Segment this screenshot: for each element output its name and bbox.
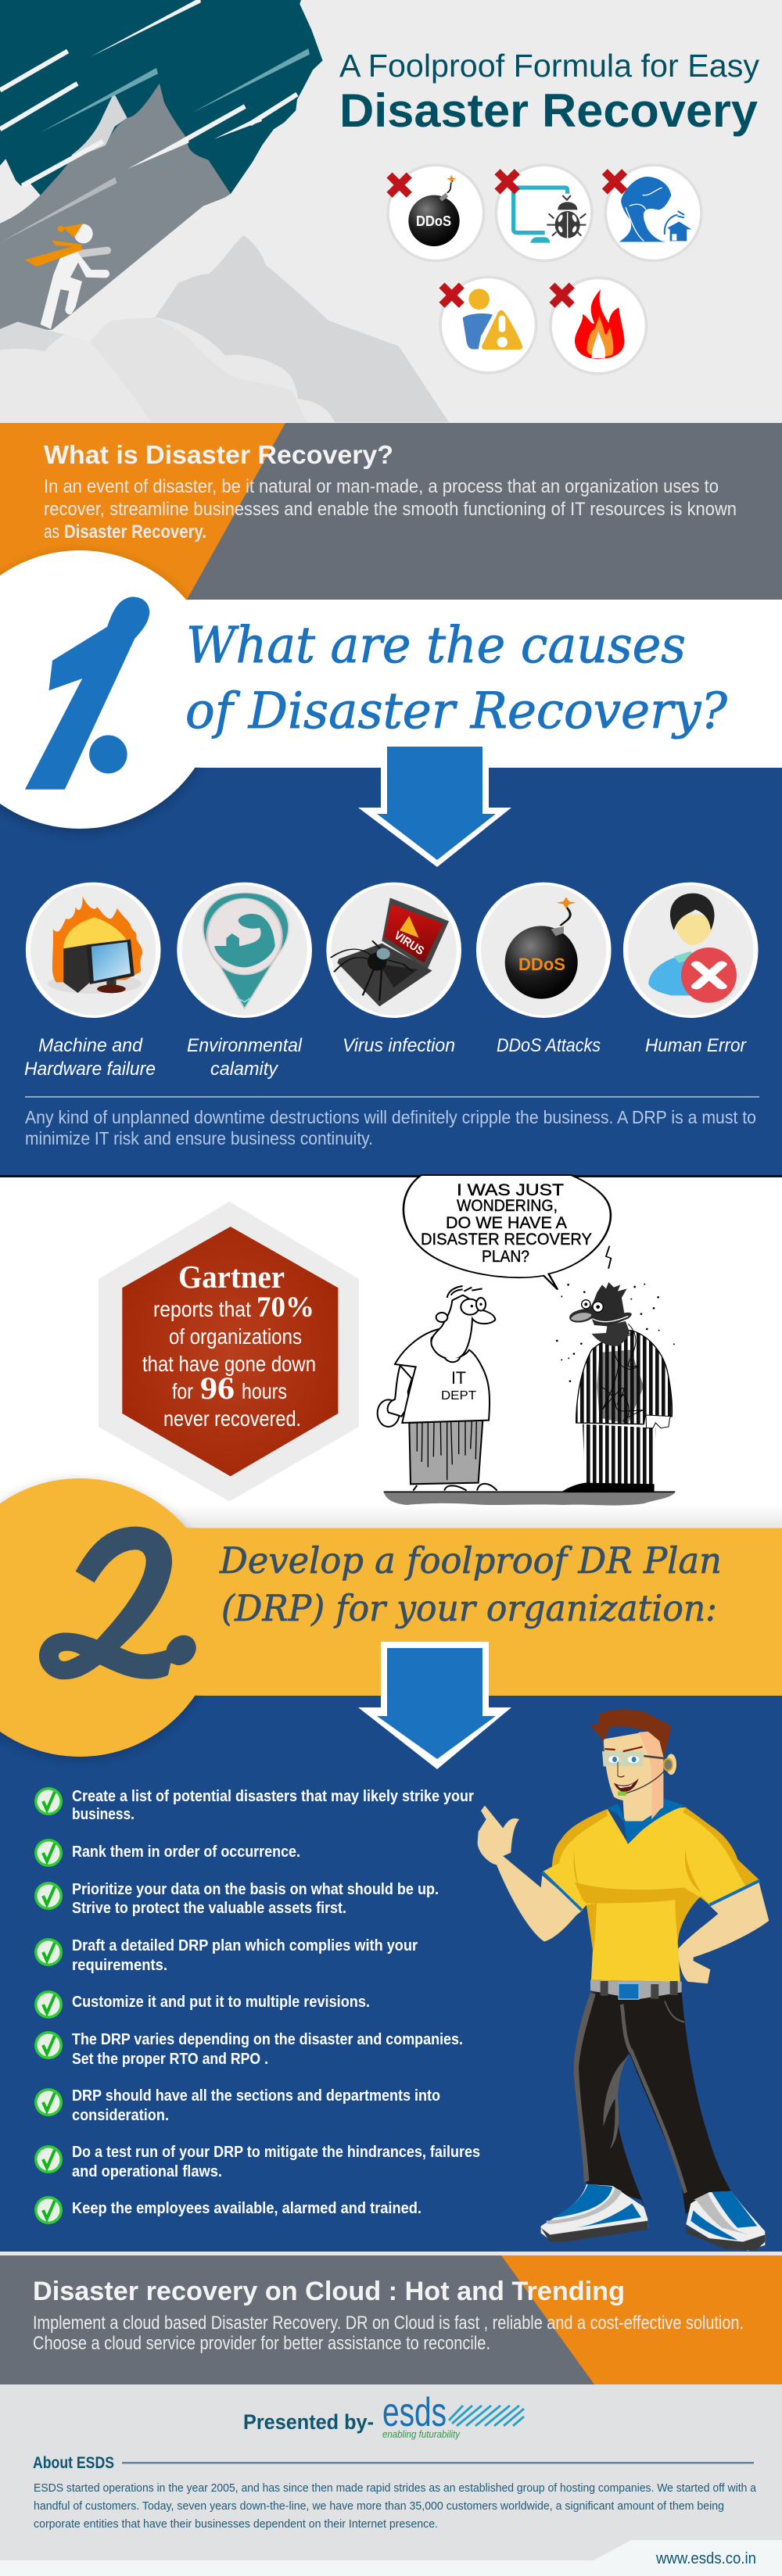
cause labels: Environmental xyxy=(187,1035,303,1056)
callout: Gartner hexagon: reports that xyxy=(153,1297,251,1321)
cause labels: Human Error xyxy=(645,1035,747,1056)
icon: environmental calamity xyxy=(179,883,310,1016)
panel: causes header band xyxy=(0,600,782,768)
about ESDS: About ESDS xyxy=(33,2454,114,2472)
callout: Gartner hexagon: 96 xyxy=(200,1370,235,1406)
checklist: requirements. xyxy=(72,1957,167,1974)
icon: human warning badge xyxy=(440,277,536,373)
panel: disaster recovery on cloud xyxy=(0,2255,782,2384)
heading: What is Disaster Recovery? xyxy=(44,440,393,469)
speech bubble text: WONDERING, xyxy=(457,1197,558,1215)
illustration: mountains and climber xyxy=(0,0,449,422)
icon: monitor with bug badge xyxy=(496,165,592,261)
pale peak xyxy=(72,93,127,162)
heading: causes: of Disaster Recovery? xyxy=(185,683,728,740)
checklist: Draft a detailed DRP plan which complies with your xyxy=(72,1937,418,1954)
checklist: DRP should have all the sections and departments into xyxy=(72,2087,440,2105)
arrow: down two xyxy=(358,1642,511,1769)
heading: causes xyxy=(185,617,728,740)
heading: develop plan xyxy=(219,1539,722,1629)
checklist: Do a test run of your DRP to mitigate the hindrances, failures xyxy=(72,2144,480,2161)
back arm xyxy=(678,1880,769,1983)
badge: number one circle xyxy=(0,550,782,832)
yellow shirt xyxy=(542,1807,760,1982)
trousers xyxy=(573,1992,731,2214)
title: Disaster Recovery xyxy=(339,84,759,137)
body text: as xyxy=(44,521,59,543)
icon: fire badge xyxy=(551,278,647,374)
about ESDS xyxy=(33,2454,757,2531)
panel: disaster recovery on cloud: Choose a cloud service provider for better assistance to reconcile. xyxy=(33,2333,490,2354)
shirt text: IT xyxy=(451,1368,466,1388)
panel: footer xyxy=(0,2384,782,2576)
icon: machine and hardware failure xyxy=(28,883,158,1016)
icon: human error xyxy=(626,883,755,1016)
checklist: consideration. xyxy=(72,2107,169,2124)
callout: Gartner hexagon: hours xyxy=(242,1379,287,1403)
neck and collar xyxy=(612,1774,663,1822)
cause labels: Virus infection xyxy=(343,1035,455,1056)
callout: Gartner hexagon: Gartner xyxy=(178,1259,285,1295)
checklist: and operational flaws. xyxy=(72,2163,222,2180)
causes note xyxy=(25,1096,759,1148)
body text: In an event of disaster, be it natural or man-made, a process that an organization uses to xyxy=(44,476,719,497)
callout: Gartner hexagon: of organizations xyxy=(169,1324,302,1349)
climber xyxy=(25,224,109,329)
cartoon: IT department and disaster xyxy=(378,1282,675,1506)
body text: Disaster Recovery. xyxy=(64,521,206,543)
callout: Gartner hexagon: never recovered. xyxy=(163,1406,301,1431)
shoes xyxy=(541,2184,647,2241)
shirt text: DEPT xyxy=(441,1389,476,1403)
lower snow slope xyxy=(0,162,328,422)
icon: tsunami wave badge xyxy=(604,165,701,261)
shadow above section two xyxy=(0,1505,782,1528)
ground xyxy=(384,1492,675,1506)
callout: Gartner hexagon: that have gone down xyxy=(142,1352,316,1376)
head xyxy=(604,1729,663,1800)
causes note: minimize IT risk and ensure business continuity. xyxy=(25,1128,373,1148)
snowy peak left xyxy=(0,159,41,224)
checklist: Keep the employees available, alarmed and trained. xyxy=(72,2200,421,2217)
body text: recover, streamline businesses and enable the smooth functioning of IT resources is known xyxy=(44,499,737,520)
foreground clouds xyxy=(0,322,90,351)
checklist xyxy=(34,1787,480,2224)
speech bubble text xyxy=(421,1181,592,1266)
website url: www.esds.co.in xyxy=(655,2550,756,2567)
cause labels: calamity xyxy=(210,1059,279,1080)
heading: develop plan: Develop a foolproof DR Plan xyxy=(219,1539,722,1582)
panel: Gartner white section xyxy=(0,1177,782,1529)
title: A Foolproof Formula for Easy xyxy=(339,48,759,84)
checklist: Strive to protect the valuable assets first. xyxy=(72,1900,346,1917)
panel: what is disaster recovery xyxy=(0,423,782,600)
label: DDoS on bomb: DDoS xyxy=(518,955,565,974)
cause labels: DDoS Attacks xyxy=(497,1035,601,1056)
speech bubble text: DISASTER RECOVERY xyxy=(421,1231,592,1249)
title xyxy=(339,48,759,137)
icon: DDoS bomb badge: DDoS xyxy=(416,213,451,229)
background pale mountain xyxy=(155,235,449,422)
heading: Disaster recovery on Cloud : Hot and Trending xyxy=(33,2277,625,2306)
stripe under plan section xyxy=(0,2252,782,2255)
checklist: The DRP varies depending on the disaster and companies. xyxy=(72,2031,463,2048)
callout: Gartner hexagon: for xyxy=(172,1379,193,1403)
checklist: Create a list of potential disasters that may likely strike your xyxy=(72,1788,474,1805)
body text xyxy=(44,476,737,543)
speech bubble text: PLAN? xyxy=(482,1248,529,1266)
heading: develop plan: (DRP) for your organization: xyxy=(221,1587,717,1629)
callout: Gartner hexagon: 70% xyxy=(256,1292,314,1324)
cause labels xyxy=(24,1035,747,1080)
grey mountain xyxy=(0,84,231,330)
black divider xyxy=(0,1175,782,1177)
panel: develop plan header band xyxy=(0,1528,782,1696)
about ESDS: handful of customers. Today, seven years down-the-line, we have more than 35,000 customers worldwide, a significant amount of them being xyxy=(34,2499,724,2513)
icon: DDoS attacks bomb xyxy=(479,883,609,1016)
panel: plan blue section xyxy=(0,1696,782,2252)
speech bubble text: DO WE HAVE A xyxy=(446,1214,567,1232)
dark teal sky shape xyxy=(0,0,323,226)
checklist: business. xyxy=(72,1806,135,1823)
presented by: Presented by- xyxy=(243,2410,374,2434)
icon: virus infection laptop xyxy=(328,883,459,1016)
shirt text xyxy=(441,1368,476,1403)
illustration: man in yellow shirt pointing xyxy=(478,1709,769,2251)
pointing arm xyxy=(478,1805,583,1942)
logo: esds: esds xyxy=(382,2390,447,2435)
callout: Gartner hexagon xyxy=(99,1202,359,1501)
logo: esds xyxy=(382,2390,524,2440)
checklist: Customize it and put it to multiple revisions. xyxy=(72,1994,370,2011)
about ESDS: corporate entities that have their businesses dependent on their Internet presence. xyxy=(34,2517,438,2531)
label: VIRUS on laptop: VIRUS xyxy=(392,929,426,958)
frazzled man xyxy=(556,1282,675,1492)
panel: hero background xyxy=(0,0,782,423)
speech bubble xyxy=(404,1175,611,1290)
checklist: Rank them in order of occurrence. xyxy=(72,1843,300,1861)
man in IT shirt xyxy=(378,1286,497,1491)
badge: number two circle xyxy=(0,1478,782,1759)
cause labels: Hardware failure xyxy=(24,1059,156,1080)
logo: esds: enabling futurability xyxy=(382,2428,461,2440)
icon: DDoS bomb badge xyxy=(388,165,484,261)
speech bubble text: I WAS JUST xyxy=(457,1181,564,1199)
cause labels: Machine and xyxy=(38,1035,143,1056)
arrow: down one xyxy=(358,747,511,867)
cause icons row xyxy=(28,883,755,1016)
belt xyxy=(590,1980,682,1999)
heading: causes: What are the causes xyxy=(186,617,686,675)
wind streaks xyxy=(0,51,297,186)
checklist: Prioritize your data on the basis on what should be up. xyxy=(72,1881,439,1898)
panel: causes blue section xyxy=(0,768,782,1175)
checklist: Set the proper RTO and RPO . xyxy=(72,2051,268,2068)
